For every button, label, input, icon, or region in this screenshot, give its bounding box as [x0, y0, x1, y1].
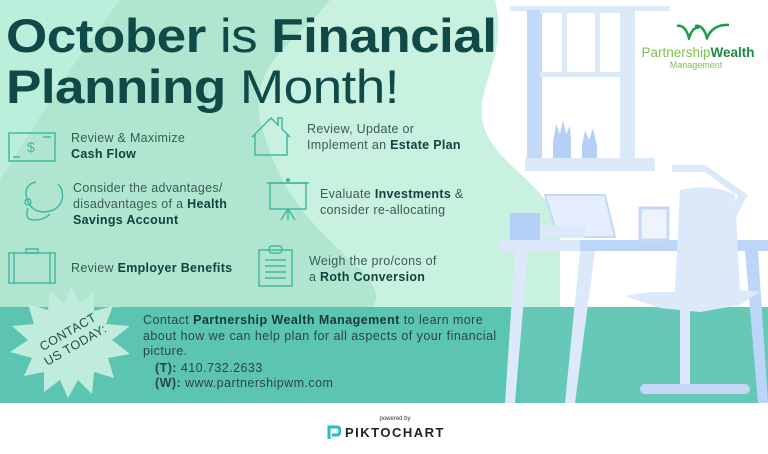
- contact text: (T): 410.732.2633: [155, 360, 263, 374]
- item: investments: consider re-allocating: [320, 203, 445, 217]
- title: [6, 9, 496, 113]
- item: investments: Evaluate Investments &: [320, 187, 464, 201]
- starburst: contact us today: US TODAY:: [42, 322, 109, 369]
- item: HSA: disadvantages of a Health: [73, 197, 227, 211]
- icon: clipboard: [258, 245, 293, 287]
- footer: piktochart: powered by: [379, 416, 411, 422]
- title: October is Financial: [6, 9, 496, 62]
- item: estate: [252, 117, 461, 156]
- lamp: [672, 165, 748, 250]
- icon: briefcase: [8, 248, 56, 284]
- item: roth: [258, 245, 437, 287]
- footer: piktochart: PIKTOCHART: [345, 425, 445, 440]
- starburst: contact us today: [10, 286, 130, 398]
- item: cash flow: [8, 131, 185, 162]
- item: cash flow: Cash Flow: [71, 147, 136, 161]
- icon: money: [8, 132, 56, 162]
- chair: [625, 187, 760, 312]
- item: HSA: Savings Account: [73, 213, 178, 227]
- logo: [641, 24, 755, 70]
- item: HSA: [24, 181, 227, 227]
- item: employer: Review Employer Benefits: [71, 261, 232, 275]
- icon: house: [252, 117, 290, 156]
- contact text: [143, 313, 497, 390]
- starburst: contact us today: CONTACT: [37, 310, 99, 354]
- laptop and items: [545, 195, 615, 237]
- contact text: Contact Partnership Wealth Management to learn more about how we can help plan for all aspects of your financial picture.: [143, 313, 497, 358]
- item: HSA: Consider the advantages/: [73, 181, 223, 195]
- item: estate: Implement an Estate Plan: [307, 138, 461, 152]
- item: cash flow: Review & Maximize: [71, 131, 185, 145]
- desk: [500, 240, 768, 251]
- icon: money: $: [27, 139, 35, 155]
- icon: easel: [267, 178, 309, 220]
- footer: piktochart: [328, 416, 445, 440]
- title: Planning Month!: [6, 60, 399, 113]
- window: [510, 6, 670, 171]
- item: roth: Weigh the pro/cons of: [309, 254, 437, 268]
- item: estate: Review, Update or: [307, 122, 414, 136]
- item: investments: [267, 178, 464, 220]
- icon: stethoscope: [24, 181, 64, 221]
- contact text: (W): www.partnershipwm.com: [155, 376, 333, 390]
- logo: PartnershipWealth: [641, 45, 755, 60]
- logo: Management: [670, 60, 722, 70]
- item: roth: a Roth Conversion: [309, 270, 425, 284]
- item: employer: [8, 248, 232, 284]
